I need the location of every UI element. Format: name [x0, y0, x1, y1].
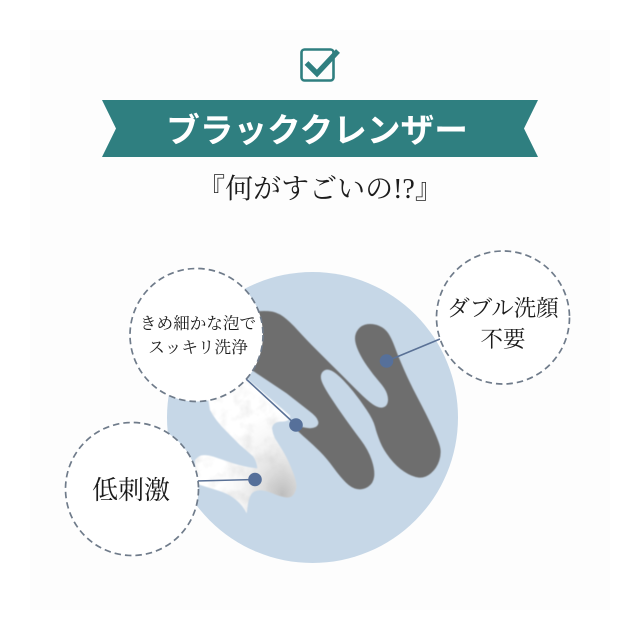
callout: no double cleansing [436, 251, 570, 384]
title ribbon: ブラッククレンザー [166, 111, 468, 150]
title ribbon [102, 100, 538, 157]
callout: fine foam: スッキリ洗浄 [148, 338, 248, 357]
callout leader line: foam [245, 378, 303, 432]
callout: fine foam: きめ細かな泡で [140, 314, 256, 333]
foam swatch [195, 378, 296, 513]
blue background circle [167, 272, 458, 563]
product diagram [167, 272, 458, 563]
callout: low irritation [66, 422, 198, 556]
callout: no double cleansing: 不要 [480, 327, 526, 352]
callout: fine foam [130, 268, 263, 402]
gray gel swatch [247, 311, 441, 489]
callout: low irritation: 低刺激 [92, 476, 170, 505]
callout leader line: double cleansing [380, 339, 440, 368]
callout leader line: low irritation [196, 473, 262, 486]
callout: no double cleansing: ダブル洗顔 [447, 296, 559, 321]
icon: checkbox [302, 50, 338, 80]
subtitle: 『何がすごいの!?』 [197, 173, 443, 205]
